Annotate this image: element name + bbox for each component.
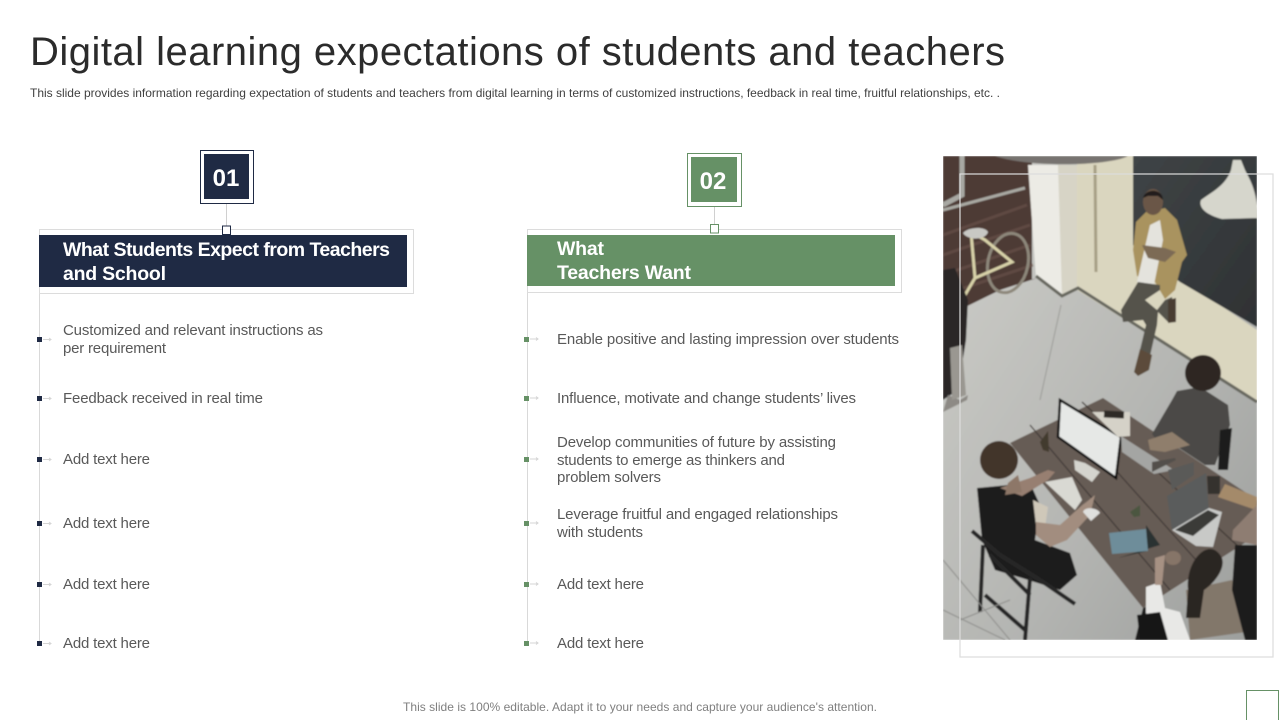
list item 3: students to emerge as thinkers and <box>557 452 785 469</box>
table <box>1010 398 1257 608</box>
heading frame <box>528 230 902 292</box>
list item 1 <box>37 322 323 357</box>
list item 3 <box>524 434 836 486</box>
number badge 01: 01 <box>213 165 239 192</box>
list item 6: Add text here <box>63 635 150 652</box>
blackboard <box>1133 156 1257 327</box>
open laptop <box>1167 473 1209 530</box>
timeline rule: students <box>38 292 40 645</box>
cream wall <box>1077 156 1257 402</box>
person at right edge <box>1232 505 1257 545</box>
list item 3: problem solvers <box>557 469 661 486</box>
heading bar: students <box>39 235 407 287</box>
list item 2: Feedback received in real time <box>63 390 263 407</box>
connector: badge to heading <box>226 204 228 226</box>
photo offset frame <box>960 174 1273 657</box>
list item 5: Add text here <box>63 576 150 593</box>
list item 1: Enable positive and lasting impression over students <box>557 331 899 348</box>
heading frame <box>40 230 414 294</box>
plant and notebook <box>1130 505 1140 517</box>
title: Digital learning expectations of students and teachers <box>30 30 1005 74</box>
number badge 02 <box>688 154 742 206</box>
seated woman in black <box>977 483 1077 590</box>
blurred person at left edge <box>943 268 968 400</box>
list item 5: Add text here <box>557 576 644 593</box>
tablet and cup <box>1168 462 1194 490</box>
list item 4 <box>524 506 838 541</box>
bicycle <box>963 228 1034 297</box>
plant on table <box>1040 431 1049 452</box>
panel: what teachers want <box>524 154 902 652</box>
brick wall <box>943 156 1037 318</box>
connector node <box>710 224 718 233</box>
floor seams <box>943 560 1010 640</box>
papers <box>1092 412 1130 437</box>
heading bar: teachers: Teachers Want <box>557 262 692 284</box>
wooden chair <box>972 531 1075 640</box>
seated woman in foreground <box>1146 582 1190 640</box>
heading bar: teachers <box>527 235 895 286</box>
subtitle: This slide provides information regarding expectation of students and teachers from digital learning in terms of customized instructions, feedback in real time, fruitful relationships, etc. . <box>30 86 1000 100</box>
monitor <box>1058 400 1121 478</box>
connector node <box>222 226 230 234</box>
ceiling lamp top <box>995 156 1128 164</box>
list item 2: Influence, motivate and change students’ lives <box>557 390 856 407</box>
white column <box>1026 164 1062 294</box>
pendant lamp <box>1200 160 1258 219</box>
photo: team working around a table <box>943 156 1258 640</box>
heading bar: teachers: What <box>557 238 604 260</box>
man typing at laptop <box>1152 387 1230 465</box>
list item 6: Add text here <box>557 635 644 652</box>
connector: badge to heading <box>714 207 716 224</box>
notebook on right <box>1218 484 1257 510</box>
heading bar: students: What Students Expect from Teachers <box>63 239 390 261</box>
number badge 02: 02 <box>700 168 726 195</box>
number badge 01 <box>200 150 254 204</box>
standing man <box>1133 208 1187 299</box>
footer note: This slide is 100% editable. Adapt it to your needs and capture your audience's attention. <box>403 700 877 714</box>
list item 1: Customized and relevant instructions as <box>63 322 323 339</box>
list item 1: per requirement <box>63 340 167 357</box>
panel: what students expect <box>37 150 414 652</box>
corner page-number box <box>1246 690 1278 720</box>
list item 3: Develop communities of future by assisting <box>557 434 836 451</box>
list item 4: Add text here <box>63 515 150 532</box>
list item 4: with students <box>556 524 643 541</box>
list item 3: Add text here <box>63 451 150 468</box>
list item 4: Leverage fruitful and engaged relationships <box>557 506 838 523</box>
heading bar: students: and School <box>63 263 166 285</box>
timeline rule: teachers <box>526 292 528 645</box>
